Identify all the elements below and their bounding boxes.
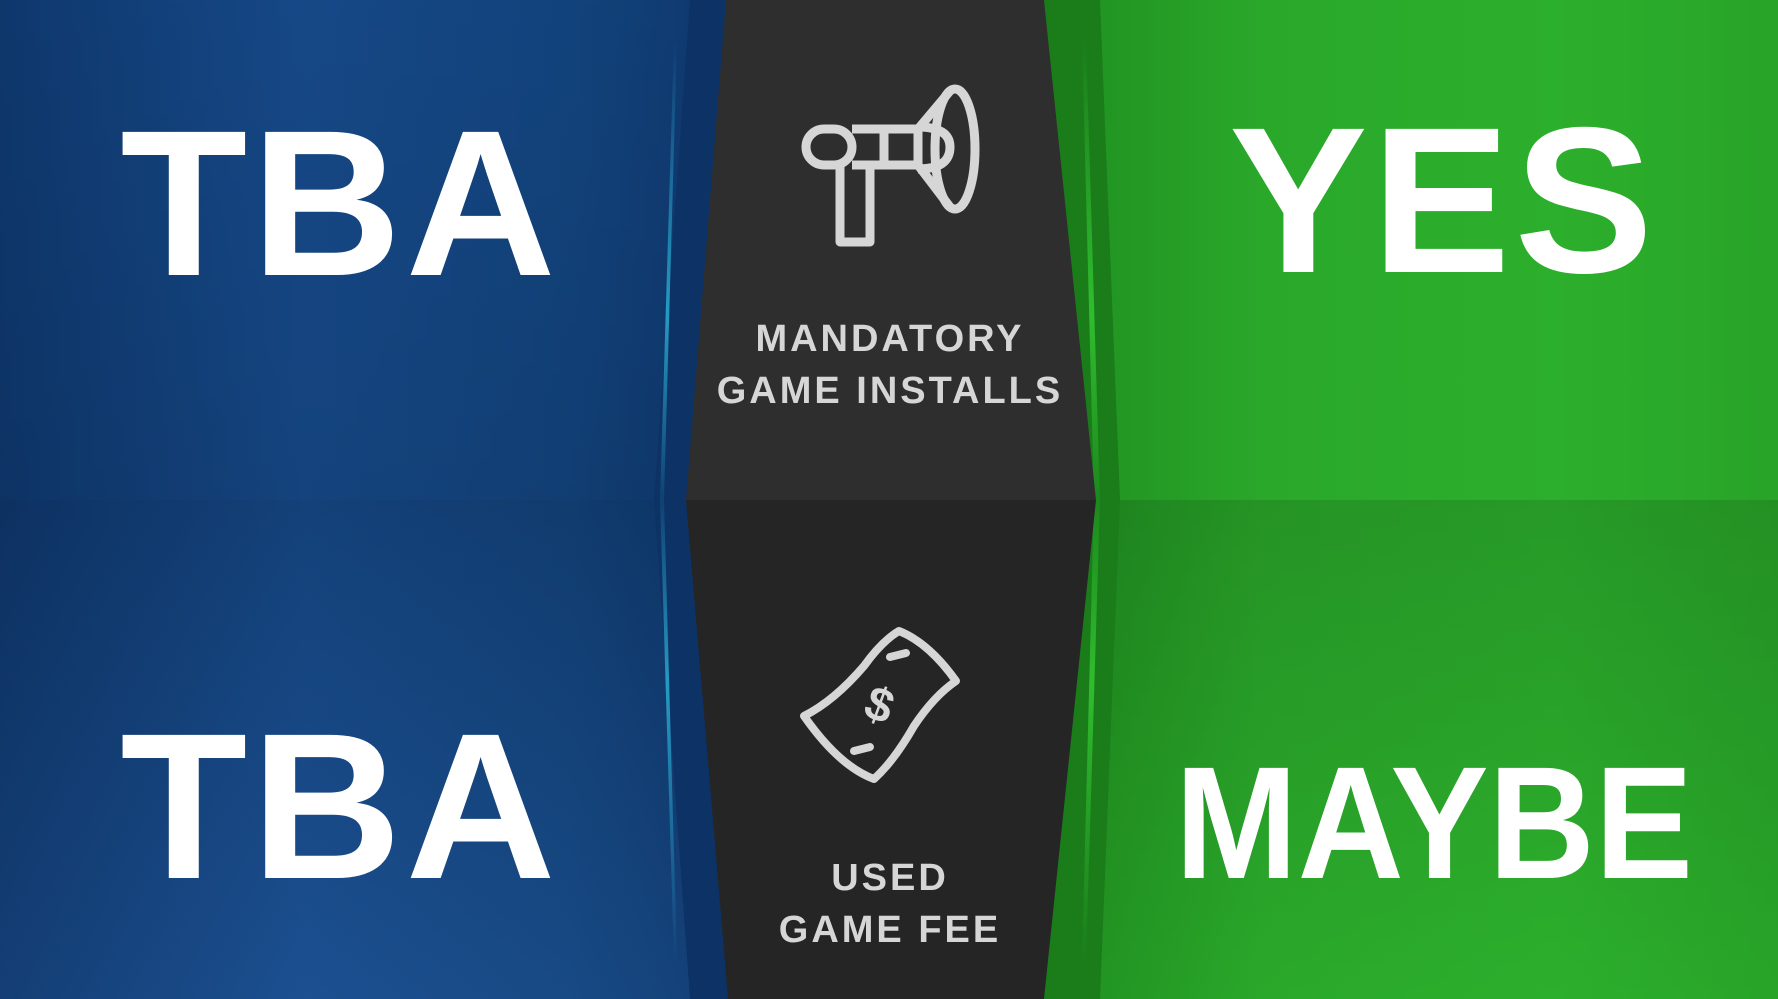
text: used game fee: GAME FEE — [779, 909, 1001, 951]
text: mandatory game installs: GAME INSTALLS — [717, 370, 1063, 412]
text: used game fee — [779, 857, 1001, 951]
icon: dollar bill — [800, 627, 960, 783]
heading: MAYBE: MAYBE — [1175, 733, 1693, 912]
panel: blue left background — [0, 0, 760, 999]
heading: TBA top: TBA — [120, 88, 560, 320]
text: mandatory game installs: MANDATORY — [755, 318, 1025, 360]
text: used game fee: USED — [831, 857, 949, 899]
panel: green right background — [1040, 0, 1778, 999]
heading: TBA bottom: TBA — [120, 691, 560, 923]
text: mandatory game installs — [717, 318, 1063, 412]
heading: YES: YES — [1229, 85, 1657, 317]
icon: megaphone — [802, 84, 980, 246]
icon: dollar bill: $ — [858, 676, 901, 735]
